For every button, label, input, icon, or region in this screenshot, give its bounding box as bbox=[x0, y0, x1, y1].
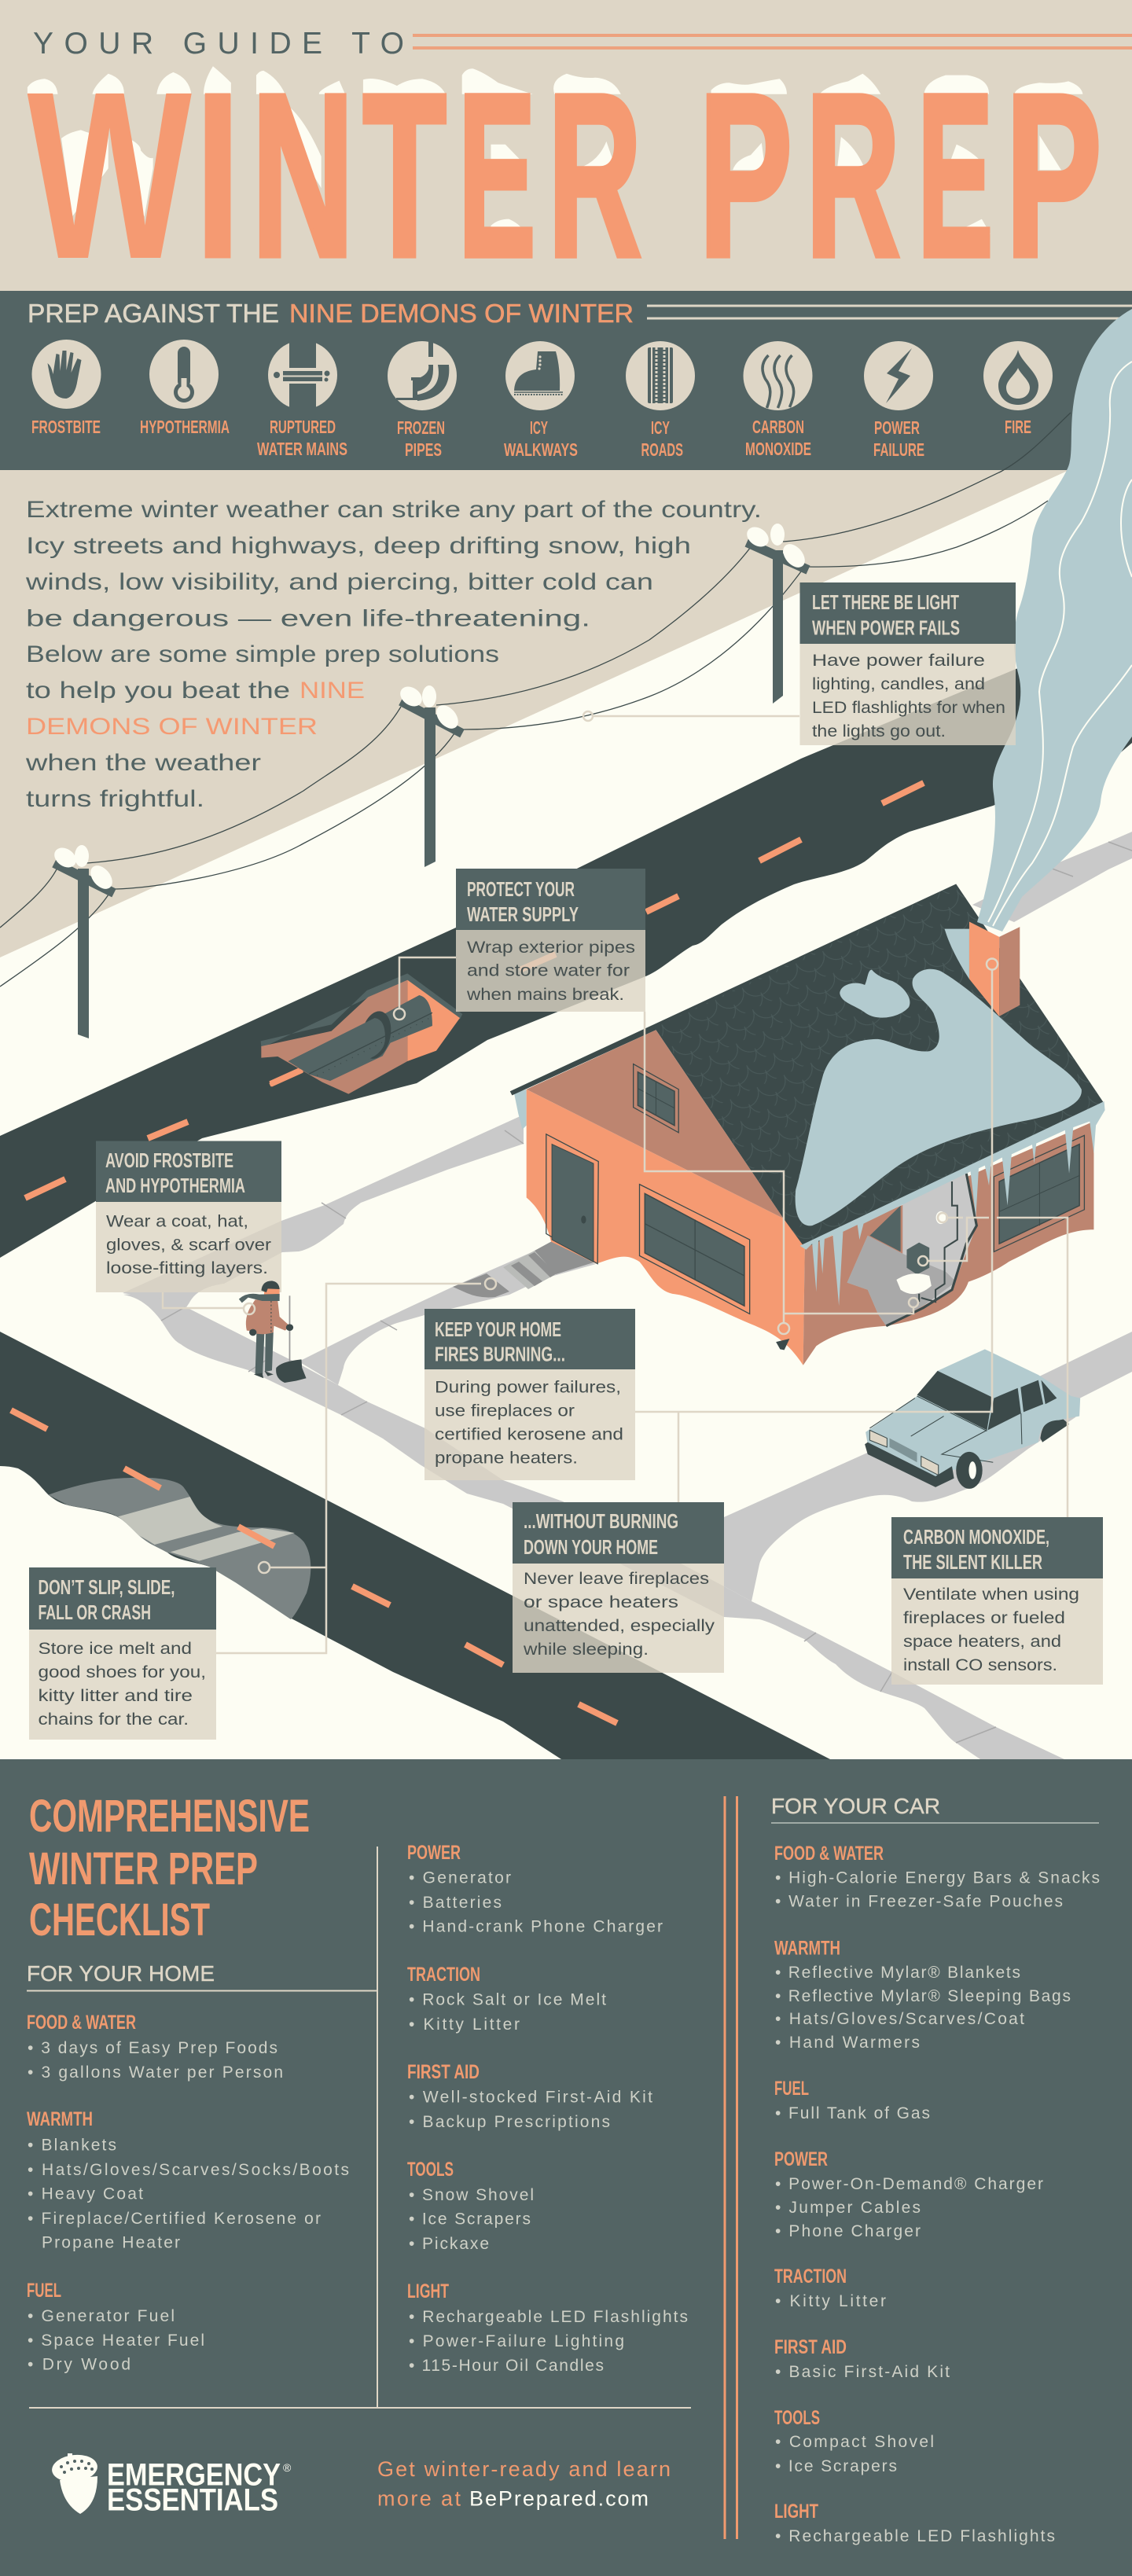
callout: carbon monoxide the silent killer bbox=[891, 1517, 1103, 1685]
list: car warmth: WARMTH bbox=[774, 1937, 840, 1959]
callout: carbon monoxide the silent killer: CARBON MONOXIDE, bbox=[903, 1525, 1049, 1549]
heading: your guide to: YOUR GUIDE TO bbox=[33, 27, 404, 61]
snow on roof bbox=[796, 969, 1082, 1226]
title: winter prep: P bbox=[1005, 47, 1102, 306]
eave and icicles bbox=[799, 1101, 1105, 1306]
list: home food and water: • 3 gallons Water per Person bbox=[28, 2063, 283, 2082]
list: car light: LIGHT bbox=[774, 2501, 818, 2523]
panel: title header bbox=[0, 0, 1132, 309]
list: home warmth: • Blankets bbox=[28, 2137, 116, 2154]
shaded side wall bbox=[803, 1122, 1093, 1365]
icon: acorn bbox=[50, 2453, 99, 2514]
list: car first aid: • Basic First-Aid Kit bbox=[775, 2363, 950, 2381]
door bbox=[546, 1134, 598, 1264]
callout: don't slip slide fall or crash: kitty litter and tire bbox=[38, 1686, 193, 1705]
attic window bbox=[634, 1064, 678, 1133]
callout: avoid frostbite and hypothermia: loose-fitting layers. bbox=[106, 1259, 268, 1277]
list: car food and water bbox=[774, 1843, 1100, 1911]
icon labels: POWER bbox=[874, 417, 920, 438]
list: car light bbox=[774, 2501, 1055, 2545]
list: car tools: TOOLS bbox=[774, 2407, 820, 2429]
decorative double rule bbox=[413, 35, 1132, 48]
logo: emergency essentials: ® bbox=[283, 2461, 292, 2474]
list: home warmth bbox=[27, 2108, 349, 2252]
callout: let there be light: Have power failure bbox=[812, 651, 985, 670]
intro paragraph: Below are some simple prep solutions bbox=[26, 641, 499, 667]
title: winter prep: E bbox=[917, 46, 993, 306]
icon: icy walkway boot bbox=[505, 341, 575, 410]
door steps and shovelled path bbox=[453, 1241, 594, 1297]
title: winter prep: E bbox=[458, 46, 535, 305]
callout: let there be light: LET THERE BE LIGHT bbox=[812, 590, 959, 614]
callout: don't slip slide fall or crash: Store ice melt and bbox=[38, 1639, 192, 1658]
list: home warmth: Propane Heater bbox=[42, 2234, 180, 2252]
callout: without burning down your home: Never leave fireplaces bbox=[524, 1569, 709, 1588]
intro paragraph bbox=[25, 497, 762, 812]
pole middle bbox=[396, 682, 462, 867]
list: home power: • Generator bbox=[409, 1869, 511, 1887]
callout: avoid frostbite and hypothermia bbox=[96, 1141, 281, 1292]
decorative double rule bbox=[647, 306, 1132, 318]
callout: don't slip slide fall or crash: good shoes for you, bbox=[38, 1663, 206, 1681]
title: winter prep: R bbox=[806, 46, 900, 305]
callout: keep your home fires burning bbox=[424, 1309, 635, 1480]
wires bbox=[0, 413, 1071, 987]
list: car first aid: FIRST AID bbox=[774, 2336, 847, 2358]
callout: without burning down your home: DOWN YOUR HOME bbox=[524, 1535, 658, 1559]
icon labels: HYPOTHERMIA bbox=[140, 417, 230, 437]
list: car warmth: • Reflective Mylar® Sleeping Bags bbox=[775, 1987, 1071, 2005]
callout: without burning down your home bbox=[513, 1502, 724, 1673]
callout: carbon monoxide the silent killer: THE SILENT KILLER bbox=[903, 1550, 1042, 1574]
title: winter prep bbox=[27, 42, 1102, 309]
list: home fuel: • Dry Wood bbox=[28, 2356, 130, 2374]
icon labels: FROZEN bbox=[397, 417, 445, 438]
callout: keep your home fires burning: propane heaters. bbox=[435, 1448, 578, 1467]
list: home power: POWER bbox=[407, 1842, 461, 1864]
list: home first aid: • Backup Prescriptions bbox=[409, 2113, 610, 2131]
road: upper highway bbox=[0, 621, 1132, 1258]
heading: prep against the nine demons of winter: NINE DEMONS OF WINTER bbox=[289, 299, 634, 328]
list: home first aid: • Well-stocked First-Aid Kit bbox=[409, 2089, 652, 2107]
list: home fuel: FUEL bbox=[27, 2280, 61, 2302]
intro paragraph: DEMONS OF WINTER bbox=[26, 714, 318, 740]
list: home warmth: • Fireplace/Certified Kerosene or bbox=[28, 2210, 321, 2228]
heading: checklist title: CHECKLIST bbox=[29, 1894, 210, 1946]
list: home fuel: • Generator Fuel bbox=[28, 2307, 175, 2325]
call to action: BePrepared.com bbox=[469, 2487, 649, 2511]
callout: don't slip slide fall or crash: DON’T SLIP, SLIDE, bbox=[38, 1575, 175, 1599]
heading: checklist title: WINTER PREP bbox=[29, 1843, 258, 1894]
callout: protect your water supply bbox=[456, 869, 645, 1012]
callout: let there be light: WHEN POWER FAILS bbox=[812, 616, 960, 640]
icon labels: ROADS bbox=[641, 439, 683, 460]
smoke plume bbox=[977, 309, 1132, 932]
icon labels: WATER MAINS bbox=[257, 439, 347, 459]
snow caps on title letters bbox=[28, 66, 1082, 234]
callout: don't slip slide fall or crash bbox=[29, 1567, 216, 1740]
illustration: car bbox=[865, 1349, 1080, 1489]
logo: emergency essentials bbox=[50, 2453, 292, 2518]
icon labels bbox=[31, 417, 1031, 460]
road lane dashes bbox=[25, 783, 924, 1198]
callout: avoid frostbite and hypothermia: Wear a coat, hat, bbox=[106, 1212, 248, 1231]
utility poles and wires bbox=[0, 413, 1071, 1038]
list: car traction: • Kitty Litter bbox=[775, 2292, 886, 2310]
illustration: person shoveling snow bbox=[239, 1281, 307, 1383]
panel: comprehensive winter prep checklist bbox=[0, 1759, 1132, 2576]
call to action: more at bbox=[377, 2487, 461, 2511]
intro paragraph: be dangerous — even life-threatening. bbox=[26, 605, 590, 632]
list: home light: • Rechargeable LED Flashlights bbox=[409, 2308, 688, 2326]
list: car fuel bbox=[774, 2078, 930, 2122]
callout: protect your water supply: when mains break. bbox=[466, 985, 624, 1004]
icon labels: FIRE bbox=[1005, 417, 1031, 437]
list: home power: • Batteries bbox=[409, 1894, 502, 1912]
scene background: beige hillside bbox=[0, 470, 1069, 957]
list: home traction bbox=[407, 1964, 606, 2034]
icon: frostbite hand bbox=[31, 340, 101, 409]
list: home food and water: • 3 days of Easy Prep Foods bbox=[28, 2039, 277, 2057]
list: car warmth: • Reflective Mylar® Blankets bbox=[775, 1964, 1020, 1982]
list: home warmth: WARMTH bbox=[27, 2108, 93, 2130]
list: home power bbox=[407, 1842, 663, 1936]
callout: protect your water supply: and store water for bbox=[467, 961, 630, 979]
list: home food and water: FOOD & WATER bbox=[27, 2012, 136, 2034]
callout: without burning down your home: unattended, especially bbox=[524, 1616, 715, 1635]
list: car tools: • Compact Shovel bbox=[775, 2433, 934, 2451]
list: home tools: • Snow Shovel bbox=[409, 2186, 534, 2204]
icon labels: FROSTBITE bbox=[31, 417, 101, 437]
callout: let there be light: lighting, candles, and bbox=[812, 674, 985, 693]
callout: carbon monoxide the silent killer: fireplaces or fueled bbox=[903, 1608, 1065, 1627]
list: car fuel: • Full Tank of Gas bbox=[775, 2104, 930, 2122]
callout: keep your home fires burning: certified kerosene and bbox=[435, 1424, 623, 1443]
connector marker on person bbox=[244, 1303, 255, 1314]
logo: emergency essentials: ESSENTIALS bbox=[107, 2483, 278, 2518]
callout: protect your water supply: PROTECT YOUR bbox=[467, 877, 575, 901]
list: car power: • Phone Charger bbox=[775, 2222, 921, 2240]
list: car traction bbox=[774, 2265, 886, 2310]
list: car tools: • Ice Scrapers bbox=[775, 2457, 897, 2475]
intro paragraph: to help you beat the bbox=[26, 678, 290, 704]
title: winter prep: I bbox=[197, 46, 239, 305]
list: home traction: • Kitty Litter bbox=[409, 2016, 520, 2034]
shaded gable bbox=[527, 1030, 784, 1218]
callout: don't slip slide fall or crash: chains for the car. bbox=[38, 1710, 189, 1729]
heading: checklist title: COMPREHENSIVE bbox=[29, 1791, 310, 1842]
callout: carbon monoxide the silent killer: install CO sensors. bbox=[903, 1655, 1057, 1674]
intro paragraph: Icy streets and highways, deep drifting snow, high bbox=[26, 533, 691, 559]
callout: avoid frostbite and hypothermia: AND HYPOTHERMIA bbox=[105, 1174, 245, 1197]
list: home fuel bbox=[27, 2280, 204, 2374]
list: home warmth: • Heavy Coat bbox=[28, 2185, 143, 2203]
icon labels: RUPTURED bbox=[270, 417, 336, 437]
icon: fire drop bbox=[983, 341, 1053, 410]
intro paragraph: turns frightful. bbox=[26, 786, 204, 812]
callout: protect your water supply: WATER SUPPLY bbox=[467, 902, 579, 926]
icon labels: WALKWAYS bbox=[504, 439, 578, 460]
list: car tools bbox=[774, 2407, 934, 2475]
list: home food and water bbox=[27, 2012, 283, 2082]
list: car warmth: • Hand Warmers bbox=[775, 2034, 920, 2052]
callout: let there be light: LED flashlights for when bbox=[812, 698, 1005, 717]
callout: keep your home fires burning: During power failures, bbox=[435, 1377, 621, 1396]
cutaway interior bbox=[847, 1174, 976, 1326]
icon labels: ICY bbox=[530, 417, 548, 438]
heading: prep against the nine demons of winter: PREP AGAINST THE bbox=[28, 299, 279, 328]
callout: keep your home fires burning: use fireplaces or bbox=[435, 1401, 575, 1420]
pole right bbox=[743, 523, 809, 704]
illustration: house bbox=[510, 884, 1105, 1365]
list: car power bbox=[774, 2148, 1043, 2240]
chimney bbox=[969, 921, 1020, 1016]
title: winter prep: N bbox=[252, 46, 355, 305]
icon labels: MONOXIDE bbox=[745, 439, 811, 459]
list: home light: • 115-Hour Oil Candles bbox=[409, 2357, 604, 2375]
icon labels: PIPES bbox=[405, 439, 442, 460]
logo: emergency essentials: EMERGENCY bbox=[107, 2457, 281, 2492]
list: car light: • Rechargeable LED Flashlights bbox=[775, 2527, 1055, 2545]
list: car first aid bbox=[774, 2336, 950, 2381]
list: car warmth bbox=[774, 1937, 1071, 2052]
left side icicle bbox=[514, 1090, 527, 1130]
walkways bbox=[123, 832, 1132, 1759]
callout: protect your water supply: Wrap exterior pipes bbox=[467, 938, 635, 957]
list: home first aid bbox=[407, 2061, 652, 2131]
icon labels: CARBON bbox=[752, 417, 804, 437]
title: winter prep: W bbox=[27, 42, 193, 309]
icon: power failure bolt bbox=[864, 341, 933, 410]
list: home tools: TOOLS bbox=[407, 2159, 454, 2181]
heading: prep against the nine demons of winter bbox=[28, 299, 634, 328]
callout: avoid frostbite and hypothermia: AVOID FROSTBITE bbox=[105, 1148, 233, 1172]
list: home traction: • Rock Salt or Ice Melt bbox=[409, 1990, 606, 2009]
callout: keep your home fires burning: FIRES BURNING... bbox=[435, 1343, 565, 1366]
callout: avoid frostbite and hypothermia: gloves, & scarf over bbox=[106, 1236, 271, 1255]
list: car power: • Jumper Cables bbox=[775, 2199, 921, 2217]
callout: carbon monoxide the silent killer: Ventilate when using bbox=[903, 1585, 1079, 1604]
callout: without burning down your home: while sleeping. bbox=[523, 1640, 649, 1659]
list: car traction: TRACTION bbox=[774, 2265, 847, 2288]
list: car warmth: • Hats/Gloves/Scarves/Coat bbox=[775, 2010, 1024, 2028]
list: home tools: • Pickaxe bbox=[409, 2235, 489, 2253]
list: home power: • Hand-crank Phone Charger bbox=[409, 1918, 663, 1936]
callout: let there be light: the lights go out. bbox=[812, 722, 946, 740]
list: home fuel: • Space Heater Fuel bbox=[28, 2332, 204, 2350]
icon labels: FAILURE bbox=[873, 439, 924, 460]
list: home traction: TRACTION bbox=[407, 1964, 480, 1986]
road lane dashes bbox=[11, 1410, 617, 1723]
list: home light: • Power-Failure Lighting bbox=[409, 2332, 624, 2350]
title: winter prep: T bbox=[363, 46, 447, 305]
callout: without burning down your home: ...WITHOUT BURNING bbox=[524, 1509, 678, 1533]
list: car food and water: • Water in Freezer-Safe Pouches bbox=[775, 1893, 1063, 1911]
call to action bbox=[377, 2457, 671, 2511]
callout: keep your home fires burning: KEEP YOUR HOME bbox=[435, 1317, 561, 1341]
icon: carbon monoxide fumes bbox=[744, 341, 813, 410]
list: home tools bbox=[407, 2159, 534, 2253]
illustration: excavated water main bbox=[261, 973, 462, 1094]
intro paragraph: when the weather bbox=[25, 750, 261, 776]
icon labels: ICY bbox=[651, 417, 670, 438]
list: home warmth: • Hats/Gloves/Scarves/Socks/Boots bbox=[28, 2161, 349, 2179]
list: home light bbox=[407, 2280, 688, 2375]
subheading: for your home: FOR YOUR HOME bbox=[27, 1961, 215, 1986]
list: car food and water: • High-Calorie Energy Bars & Snacks bbox=[775, 1869, 1100, 1887]
fire alarm marker bbox=[776, 1339, 789, 1350]
list: home light: LIGHT bbox=[407, 2280, 449, 2302]
icon: ruptured water main bbox=[268, 339, 337, 411]
list: home tools: • Ice Scrapers bbox=[409, 2210, 531, 2229]
callout: carbon monoxide the silent killer: space heaters, and bbox=[903, 1632, 1061, 1651]
list: car food and water: FOOD & WATER bbox=[774, 1843, 884, 1865]
side window bbox=[994, 1135, 1084, 1251]
intro paragraph: Extreme winter weather can strike any part of the country. bbox=[26, 497, 762, 523]
orange front wall bbox=[527, 1090, 805, 1365]
callout: without burning down your home: or space heaters bbox=[524, 1593, 678, 1611]
panel: nine demons band bbox=[0, 291, 1132, 470]
garage door bbox=[640, 1185, 750, 1314]
icon: hypothermia thermometer bbox=[149, 340, 219, 409]
title: winter prep: R bbox=[548, 46, 641, 305]
subheading: for your car: FOR YOUR CAR bbox=[771, 1794, 940, 1818]
list: car power: POWER bbox=[774, 2148, 828, 2170]
intro paragraph: winds, low visibility, and piercing, bitter cold can bbox=[25, 569, 653, 595]
list: home first aid: FIRST AID bbox=[407, 2061, 480, 2083]
list: car fuel: FUEL bbox=[774, 2078, 809, 2100]
heading: checklist title bbox=[29, 1791, 310, 1946]
connector lines bbox=[163, 711, 1068, 1653]
title: winter prep: P bbox=[699, 46, 792, 305]
roof bbox=[510, 884, 1104, 1249]
call to action: Get winter-ready and learn bbox=[377, 2457, 671, 2481]
list: car power: • Power-On-Demand® Charger bbox=[775, 2175, 1043, 2193]
icon: icy road tire tracks bbox=[626, 341, 695, 410]
icon: frozen pipes bbox=[388, 341, 457, 410]
icy patch bbox=[49, 1478, 311, 1619]
divider lines bbox=[27, 1847, 691, 2408]
pole left bbox=[50, 843, 116, 1038]
road: lower highway with ice patch bbox=[0, 1332, 830, 1759]
callout: don't slip slide fall or crash: FALL OR CRASH bbox=[38, 1600, 151, 1624]
callout: let there be light bbox=[800, 582, 1016, 745]
intro paragraph: NINE bbox=[300, 678, 365, 704]
